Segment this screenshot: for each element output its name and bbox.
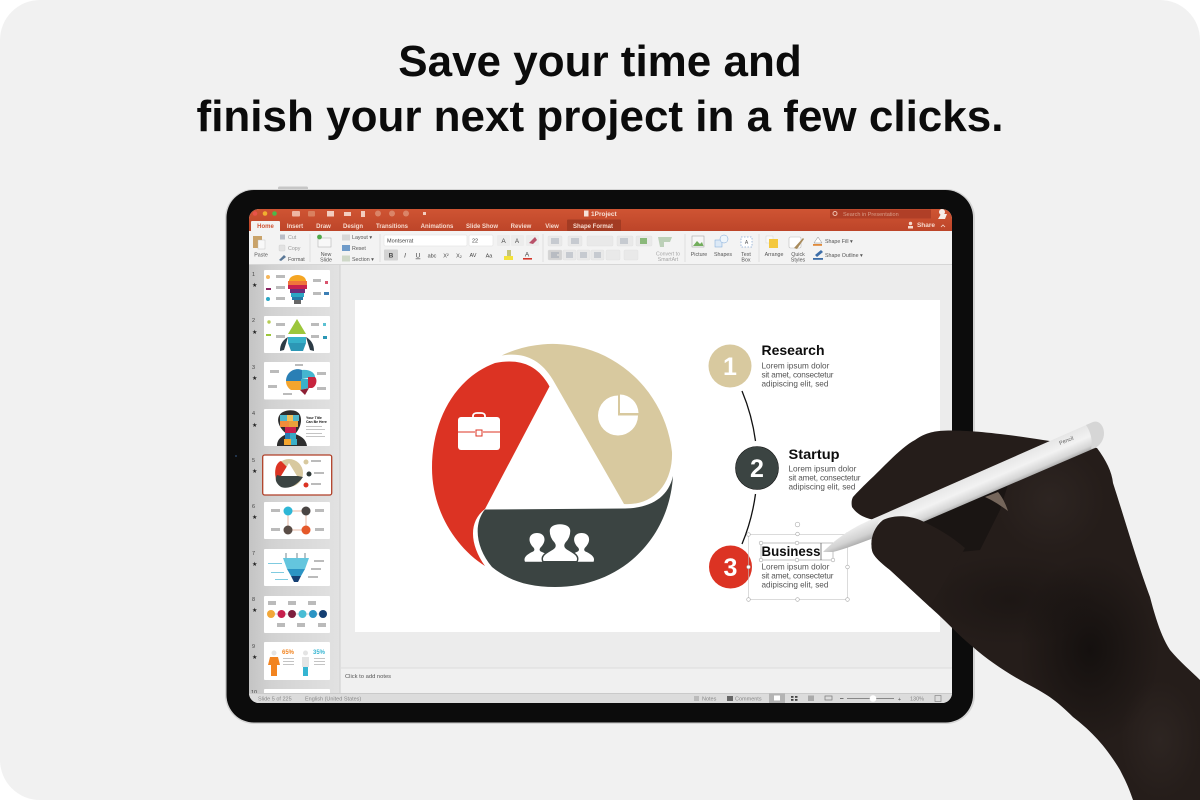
- step 2 startup: Startup: [788, 446, 840, 462]
- ribbon toolbar: [249, 231, 952, 265]
- thumbnail numbers and stars: 1: [252, 272, 255, 278]
- title bar and tabs: Review: [511, 224, 532, 230]
- thumbnail numbers and stars: ★: [252, 329, 257, 336]
- step 3 business with selection: Lorem ipsum dolor: [762, 562, 830, 572]
- thumbnail 7 funnel: [264, 549, 330, 586]
- title bar and tabs: Home: [257, 224, 274, 230]
- font controls: [384, 235, 539, 260]
- status bar: Notes: [702, 696, 717, 702]
- thumbnail 9 percentages: 35%: [313, 650, 326, 656]
- insert group: Picture: [691, 252, 707, 258]
- icon: briefcase: [458, 413, 500, 450]
- step connector arcs: [742, 391, 756, 544]
- drawing group: Styles: [791, 258, 806, 264]
- thumbnail 4 head: Your Title: [306, 416, 322, 420]
- slides group: New: [321, 252, 331, 258]
- hand silhouette: [840, 420, 1200, 800]
- clipboard group: Paste: [254, 252, 268, 258]
- icon: pencil: [823, 422, 1104, 552]
- step 1 research: sit amet, consectetur: [762, 370, 834, 380]
- step 2 startup: adipiscing elit, sed: [788, 482, 856, 492]
- insert group: [691, 235, 752, 264]
- title bar and tabs: Design: [343, 224, 363, 230]
- title bar and tabs: Draw: [316, 224, 331, 230]
- thumbnail numbers and stars: 7: [252, 551, 255, 557]
- triangle cycle diagram: [432, 344, 673, 587]
- thumbnail numbers and stars: 9: [252, 644, 255, 650]
- thumbnail 9 percentages: 65%: [282, 650, 295, 656]
- thumbnail 10 partial: [264, 689, 330, 693]
- thumbnail 6 swot: [264, 502, 330, 539]
- slide thumbnails pane: [249, 265, 340, 699]
- step 3 business with selection: Business: [762, 543, 821, 559]
- slides group: Layout ▾: [352, 235, 372, 241]
- thumbnail numbers and stars: ★: [252, 514, 257, 521]
- title bar and tabs: Transitions: [376, 224, 409, 230]
- thumbnail numbers and stars: 8: [252, 597, 255, 603]
- thumbnail numbers and stars: 6: [252, 504, 255, 510]
- status bar: English (United States): [305, 696, 361, 702]
- thumbnail numbers and stars: ★: [252, 607, 257, 614]
- slides group: [317, 234, 374, 264]
- clipboard group: [253, 234, 305, 263]
- title bar and tabs: Animations: [421, 224, 454, 230]
- clipboard group: Cut: [288, 235, 297, 241]
- insert group: Text: [741, 252, 751, 258]
- title: Save your time and: [398, 37, 802, 86]
- step 2 startup: sit amet, consectetur: [788, 474, 861, 482]
- thumbnail 5 selected: [263, 455, 332, 495]
- clipboard group: Copy: [288, 246, 301, 252]
- drawing group: [765, 236, 863, 264]
- gold segment: [502, 344, 672, 504]
- drawing group: Quick: [791, 252, 805, 258]
- thumbnail 1 lightbulb: [264, 270, 330, 307]
- step 3 business with selection: adipiscing elit, sed: [762, 580, 829, 590]
- font controls: 22: [472, 238, 478, 244]
- thumbnail numbers and stars: 2: [252, 318, 255, 324]
- hand holding pencil: [823, 420, 1200, 800]
- thumbnail numbers and stars: [252, 272, 257, 693]
- dark segment: [478, 476, 673, 587]
- status bar: [249, 693, 952, 703]
- title: finish your next project in a few clicks.: [197, 92, 1003, 141]
- step 3 business with selection: [709, 522, 849, 601]
- thumbnail numbers and stars: ★: [252, 422, 257, 429]
- step 1 research: adipiscing elit, sed: [762, 380, 829, 388]
- thumbnail numbers and stars: 5: [252, 458, 255, 464]
- selection handles: [747, 522, 849, 601]
- smartart group: SmartArt: [658, 257, 679, 263]
- slides group: Reset: [352, 246, 366, 252]
- status bar: 130%: [910, 696, 924, 702]
- thumbnail 9 percentages: [264, 642, 330, 680]
- thumbnail numbers and stars: 4: [252, 411, 255, 417]
- icon: pie chart: [598, 394, 638, 436]
- red segment: [432, 361, 550, 566]
- status bar: Slide 5 of 225: [258, 696, 292, 702]
- step 3 business with selection: sit amet, consectetur: [762, 572, 834, 580]
- step 1 research: Research: [762, 342, 824, 358]
- insert group: A: [745, 240, 749, 246]
- thumb over pencil: [871, 516, 965, 607]
- title bar and tabs: Share: [917, 222, 935, 229]
- thumbnail numbers and stars: ★: [252, 468, 257, 475]
- clipboard group: Format: [288, 257, 305, 263]
- thumbnail 3 brain: [264, 362, 330, 400]
- step 2 startup: [736, 446, 861, 492]
- step 3 business with selection: 3: [724, 554, 737, 582]
- icon: pencil: Pencil: [1059, 436, 1075, 447]
- slides group: Section ▾: [352, 257, 374, 263]
- thumbnail 4 head: Can Be Here: [306, 420, 327, 424]
- font controls: X²: [443, 254, 449, 260]
- insert group: Shapes: [714, 252, 732, 258]
- step 2 startup: Lorem ipsum dolor: [788, 464, 857, 474]
- slide canvas: [355, 300, 940, 632]
- thumbnail numbers and stars: 3: [252, 365, 255, 371]
- font controls: A: [501, 238, 506, 245]
- title bar and tabs: View: [545, 224, 559, 230]
- drawing group: Arrange: [765, 252, 783, 258]
- title: [197, 37, 1003, 141]
- thumbnail numbers and stars: ★: [252, 561, 257, 568]
- font controls: Montserrat: [387, 238, 414, 244]
- title bar and tabs: [249, 209, 952, 232]
- font controls: A: [515, 239, 519, 245]
- font controls: U: [416, 252, 421, 260]
- thumbnail numbers and stars: 10: [251, 690, 257, 696]
- step 1 research: Lorem ipsum dolor: [762, 362, 830, 370]
- font controls: AV: [470, 253, 477, 259]
- font controls: B: [389, 252, 394, 260]
- font controls: I: [404, 252, 406, 260]
- thumbnail 8 timeline: [264, 596, 330, 633]
- tablet device: [225, 186, 975, 724]
- smartart group: [656, 237, 680, 263]
- drawing group: Shape Fill ▾: [825, 239, 853, 245]
- application screen: [249, 209, 952, 703]
- title bar and tabs: Search in Presentation: [843, 212, 899, 218]
- insert group: Box: [741, 258, 751, 264]
- font controls: Aa: [486, 254, 493, 260]
- drawing group: Shape Outline ▾: [825, 253, 863, 259]
- notes bar: Click to add notes: [345, 674, 391, 680]
- thumbnail numbers and stars: ★: [252, 654, 257, 661]
- title bar and tabs: Insert: [287, 224, 303, 230]
- step 2 startup: 2: [750, 455, 764, 483]
- font controls: abc: [428, 254, 437, 260]
- thumbnail numbers and stars: ★: [252, 375, 257, 382]
- status bar: Comments: [735, 696, 762, 702]
- smartart group: Convert to: [656, 252, 680, 258]
- thumbnail 4 head: [264, 409, 330, 446]
- step 1 research: 1: [723, 353, 737, 381]
- thumbnail 2 rocket: [264, 316, 330, 353]
- title bar and tabs: 1Project: [591, 211, 617, 218]
- font controls: X₂: [456, 254, 462, 260]
- icon: people: [525, 524, 594, 562]
- status bar: +: [898, 697, 901, 703]
- thumbnail numbers and stars: ★: [252, 282, 257, 289]
- title bar and tabs: Slide Show: [466, 224, 498, 230]
- font controls: A: [525, 252, 530, 258]
- paragraph controls: [548, 236, 652, 260]
- notes bar: [341, 668, 952, 678]
- step 1 research: [708, 342, 834, 388]
- slides group: Slide: [320, 258, 332, 264]
- title bar and tabs: Shape Format: [573, 224, 613, 230]
